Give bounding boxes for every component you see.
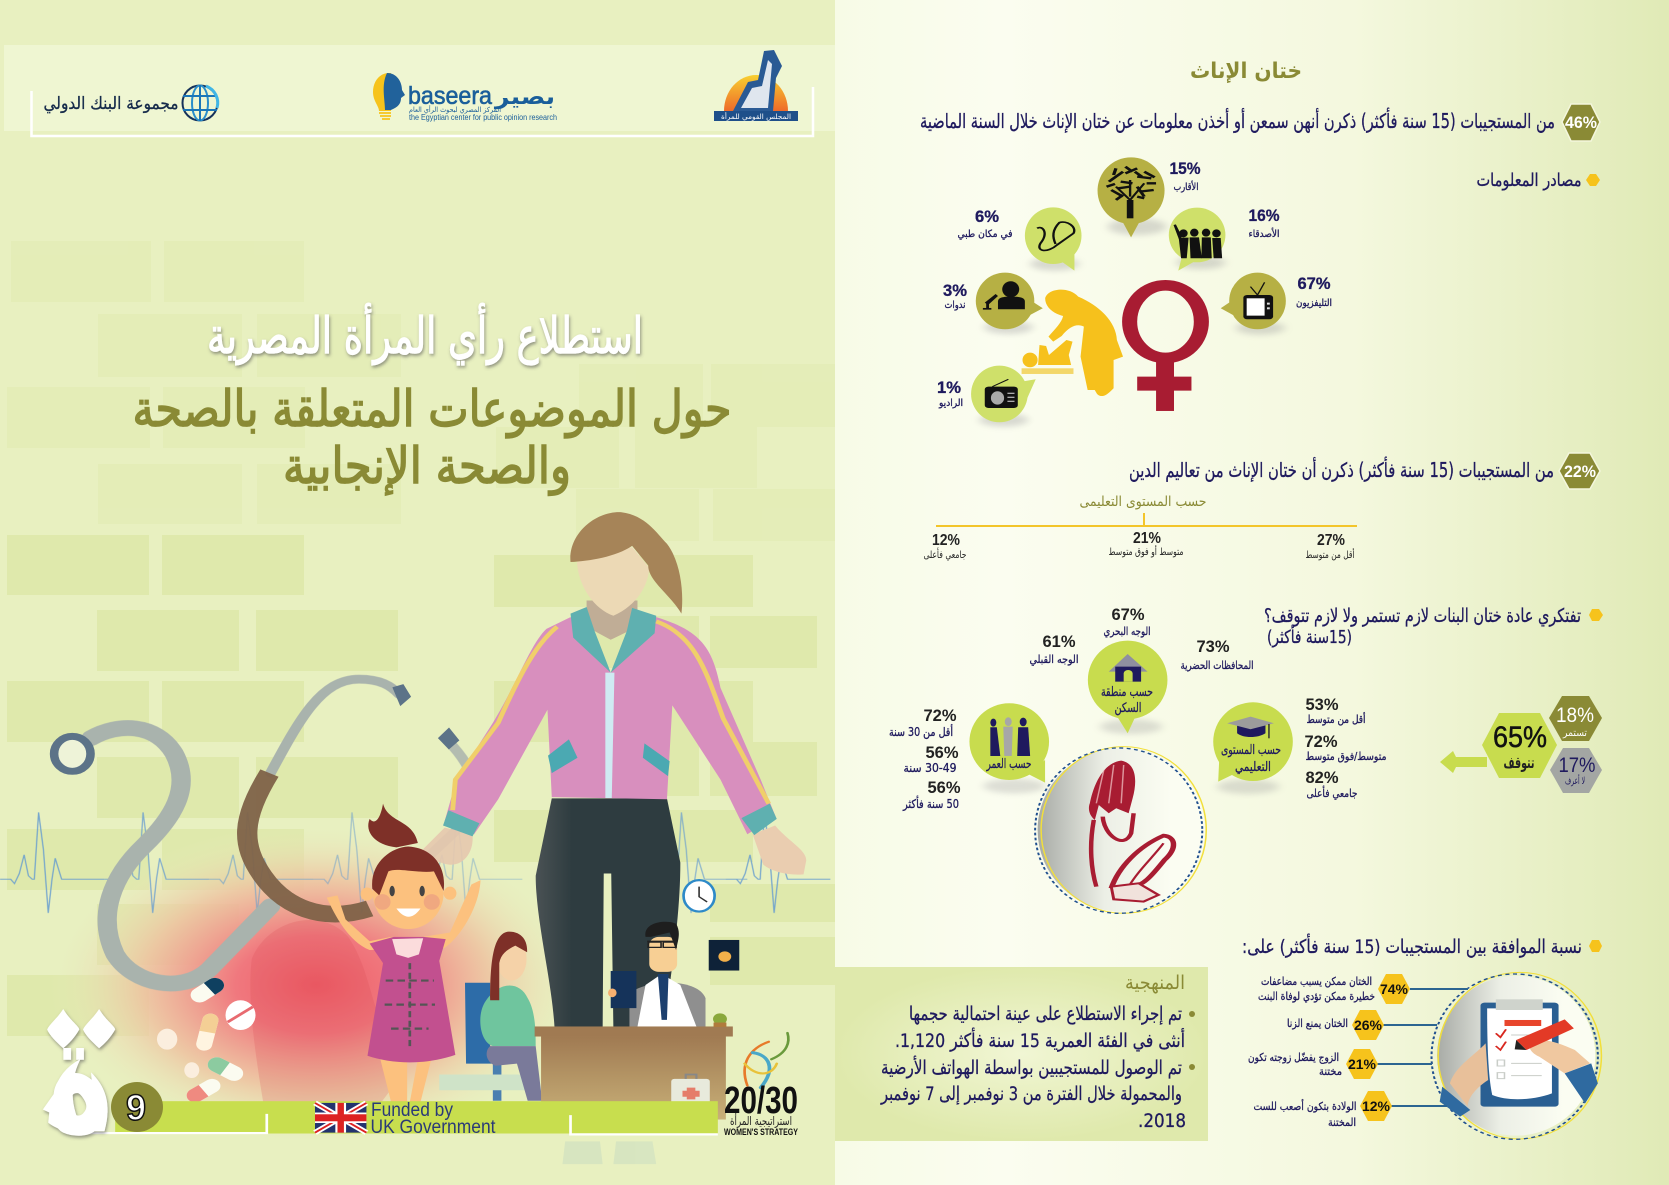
icon: family tree <box>1107 167 1156 218</box>
arrow <box>1440 751 1487 773</box>
age values: 50 سنة فأكثر <box>902 795 959 812</box>
logo: National Council for Women <box>714 50 798 121</box>
ultrasound picture <box>709 940 739 971</box>
friends label: الأصدقاء <box>1248 227 1280 240</box>
faint upper brick wall <box>7 241 835 541</box>
residence values: الوجه البحري <box>1104 625 1150 638</box>
age values: 56% <box>926 743 958 762</box>
item: husband prefers 21% <box>1248 1049 1378 1079</box>
agreement items <box>1248 974 1468 1129</box>
logo: World Bank Group: مجموعة البنك الدولي <box>44 94 178 114</box>
title line 3: والصحة الإنجابية <box>283 437 571 496</box>
logo: Baseera: baseera <box>408 82 492 110</box>
icon: group of friends <box>1174 224 1222 258</box>
icon: right sleeve <box>1565 1063 1598 1103</box>
hex: 65% stop <box>1482 713 1557 778</box>
below intermediate value: أقل من متوسط <box>1306 548 1355 561</box>
stethoscope <box>54 679 476 983</box>
university value: جامعي فأعلى <box>924 547 966 561</box>
bubble labels <box>986 685 1281 775</box>
bubble: medical place <box>1025 207 1082 271</box>
header bracket <box>32 87 813 136</box>
panel: methodology <box>835 967 1208 1141</box>
radio label: الراديو <box>938 398 963 409</box>
icon: red marker <box>1515 1019 1574 1050</box>
icon: stethoscope <box>1037 222 1074 250</box>
icon: speaker <box>983 281 1025 310</box>
icon: clipboard <box>1481 999 1559 1107</box>
bubble: television <box>1221 273 1286 335</box>
item: complications 74% <box>1258 974 1410 1004</box>
hex: 65% stop: 65% <box>1493 721 1547 754</box>
bubble: residence <box>1088 641 1167 734</box>
residence label <box>1101 685 1153 716</box>
education values: 82% <box>1306 768 1338 787</box>
doctor <box>608 922 706 1026</box>
bubble: relatives <box>1098 157 1166 237</box>
residence values: المحافظات الحضرية <box>1180 659 1254 672</box>
methodology text: 2018. <box>1138 1110 1186 1132</box>
hex: 18% continue <box>1549 696 1602 741</box>
medical label: 6% <box>975 207 999 226</box>
hex: 17% don't know: 17% <box>1558 754 1596 777</box>
residence label: حسب منطقة <box>1101 685 1153 700</box>
pills <box>157 975 256 1105</box>
question heading: (15سنة فأكثر) <box>1267 624 1352 648</box>
education label: التعليمي <box>1235 760 1271 775</box>
residence values <box>1030 605 1254 672</box>
item: husband prefers 21%: مختنة <box>1319 1065 1342 1078</box>
item: husband prefers 21%: الزوج يفضّل زوجته تكون <box>1248 1051 1339 1064</box>
source labels <box>937 159 1332 409</box>
green bottom bar <box>115 1101 718 1134</box>
bubble: age <box>969 703 1049 793</box>
title line 1: استطلاع رأي المرأة المصرية <box>207 303 643 365</box>
hex: 18% continue: 18% <box>1556 704 1594 727</box>
heading: agreement: نسبة الموافقة بين المستجيبات (15 سنة فأكثر) على: <box>1242 933 1582 958</box>
TV label <box>1296 274 1332 309</box>
bubble: education <box>1213 702 1293 794</box>
education label: حسب المستوى <box>1221 743 1281 758</box>
logo: Women's Strategy 2030 <box>724 1033 798 1137</box>
friends label: 16% <box>1248 206 1280 225</box>
page background left <box>0 0 835 1185</box>
logo: Women's Strategy 2030: استراتيجية المرأة <box>730 1113 792 1129</box>
stat row: 46%: من المستجيبات (15 سنة فأكثر) ذكرن أنهن سمعن أو أخذن معلومات عن ختان الإناث خلال السنة الماضية <box>920 107 1555 133</box>
icon: bulb with head <box>373 73 405 119</box>
icon: right hand <box>1529 1040 1590 1073</box>
information sources diagram <box>971 157 1286 427</box>
icon: radio <box>985 379 1018 408</box>
venus symbol <box>1130 285 1201 411</box>
calligraphy swirl <box>745 1033 788 1088</box>
icon: left sleeve <box>1440 1087 1470 1117</box>
question heading <box>1264 605 1603 648</box>
desk <box>535 1026 733 1120</box>
residence values: 61% <box>1042 632 1076 651</box>
bubble: friends <box>1169 208 1225 271</box>
radio label <box>937 378 963 409</box>
seminars label <box>943 281 967 311</box>
methodology heading: المنهجية <box>1125 972 1185 994</box>
connector lines <box>1377 989 1468 1106</box>
header band <box>4 45 835 131</box>
illustration: health scene <box>0 512 830 1164</box>
girl circle <box>1035 747 1206 913</box>
age values: 56% <box>928 778 960 797</box>
wall clock <box>684 880 715 912</box>
issue number badge <box>111 1082 163 1132</box>
medical label <box>958 207 1013 240</box>
age label: حسب العمر <box>986 757 1032 772</box>
age values <box>889 706 960 812</box>
methodology bullets <box>1189 1011 1195 1017</box>
residence values: 67% <box>1112 605 1144 624</box>
icon: left hand <box>1450 1043 1488 1107</box>
stat row: 22% <box>1129 453 1600 489</box>
education values <box>1304 695 1387 800</box>
hex: 17% don't know <box>1550 748 1602 793</box>
opinion diagram <box>969 641 1293 913</box>
hex: 17% don't know: لا أعرف <box>1565 774 1585 787</box>
UK flag <box>315 1103 366 1133</box>
TV label: التليفزيون <box>1296 298 1332 309</box>
bubble: radio <box>971 366 1036 427</box>
icon: graduation cap <box>1227 717 1274 738</box>
issue number badge: 9 <box>126 1087 146 1128</box>
funded by text: Funded by <box>371 1100 453 1121</box>
hex: 65% stop: تتوقف <box>1504 753 1534 772</box>
education values: متوسط/فوق متوسط <box>1306 750 1387 763</box>
logo: Baseera: المركز المصري لبحوث الرأي العام <box>409 105 501 114</box>
education values: 53% <box>1306 695 1338 714</box>
series logo <box>43 982 115 1170</box>
stat row: 22%: 22% <box>1564 462 1596 481</box>
radio label: 1% <box>937 378 961 397</box>
bottom white bracket <box>70 1114 718 1134</box>
item: prevents adultery 26% <box>1287 1010 1384 1040</box>
pale feet <box>562 1141 656 1164</box>
age values: أقل من 30 سنة <box>889 724 953 740</box>
heartbeat line <box>0 812 830 913</box>
below intermediate value: 27% <box>1317 532 1345 549</box>
item: husband prefers 21%: 21% <box>1348 1056 1377 1072</box>
methodology text <box>880 1003 1186 1132</box>
age values: 72% <box>924 706 956 725</box>
stat row: 22%: من المستجيبات (15 سنة فأكثر) ذكرن أن ختان الإناث من تعاليم الدين <box>1129 456 1554 482</box>
education breakdown chart <box>924 494 1357 561</box>
heading: FGM: ختان الإناث <box>1190 59 1302 84</box>
hex: 18% continue: تستمر <box>1562 728 1587 739</box>
icon: house <box>1109 654 1148 682</box>
relatives label: الأقارب <box>1174 180 1198 193</box>
intermediate value <box>1108 530 1184 558</box>
methodology text: أنثى في الفئة العمرية 15 سنة فأكثر 1,120. <box>895 1027 1185 1052</box>
girl in pink dress <box>327 804 481 1102</box>
university value: 12% <box>932 532 960 549</box>
funded by text: UK Government <box>370 1117 496 1138</box>
intermediate value: متوسط أو فوق متوسط <box>1108 545 1184 558</box>
university value <box>924 532 966 561</box>
stat row: 46% <box>920 104 1600 141</box>
below intermediate value <box>1306 532 1355 561</box>
friends label <box>1248 206 1280 240</box>
methodology text: والمحمولة خلال الفترة من 3 نوفمبر إلى 7 نوفمبر <box>880 1083 1182 1106</box>
logo: Women's Strategy 2030: 20/30 <box>724 1080 798 1122</box>
item: prevents adultery 26%: الختان يمنع الزنا <box>1287 1017 1348 1030</box>
pregnant woman on chair <box>439 932 542 1101</box>
education breakdown chart: حسب المستوى التعليمى <box>1080 494 1206 510</box>
TV label: 67% <box>1298 274 1330 293</box>
item: prevents adultery 26%: 26% <box>1354 1017 1383 1033</box>
plant <box>713 1013 727 1027</box>
relatives label <box>1170 159 1200 193</box>
logo: World Bank Group <box>44 85 218 121</box>
first-aid kit <box>671 1075 710 1105</box>
item: harder childbirth 12%: المختنة <box>1328 1116 1356 1129</box>
age values: 30-49 سنة <box>904 761 956 775</box>
residence label: السكن <box>1114 701 1142 716</box>
faded sitting figure <box>250 920 407 1129</box>
logo: Baseera: بصير <box>494 85 555 110</box>
residence values: 73% <box>1196 637 1230 656</box>
funded by text <box>370 1100 496 1138</box>
relatives label: 15% <box>1170 159 1200 178</box>
mother and baby <box>1022 290 1123 396</box>
item: complications 74%: 74% <box>1380 981 1409 997</box>
red glow <box>48 823 584 1147</box>
item: harder childbirth 12% <box>1254 1091 1392 1129</box>
icon: TV <box>1243 282 1273 319</box>
page background right <box>835 0 1669 1185</box>
stat row: 46%: 46% <box>1565 113 1597 132</box>
logo: Women's Strategy 2030: WOMEN'S STRATEGY <box>724 1127 798 1137</box>
clipboard circle <box>1432 972 1601 1139</box>
education label <box>1221 743 1281 775</box>
education values: 72% <box>1304 732 1338 751</box>
education values: جامعي فأعلى <box>1306 785 1358 800</box>
title line 2: حول الموضوعات المتعلقة بالصحة <box>132 380 732 438</box>
question heading: تفتكري عادة ختان البنات لازم تستمر ولا لازم تتوقف؟ <box>1264 605 1581 627</box>
item: complications 74%: خطيرة ممكن تؤدي لوفاة البنت <box>1258 990 1375 1003</box>
item: harder childbirth 12%: 12% <box>1362 1098 1391 1114</box>
icon: leaf marks and face profile <box>43 1009 115 1133</box>
seminars label: ندوات <box>944 300 966 311</box>
woman in pink jacket <box>421 512 806 1029</box>
methodology text: تم الوصول للمستجيبين بواسطة الهواتف الأرضية <box>881 1056 1182 1079</box>
item: complications 74%: الختان ممكن يسبب مضاعفات <box>1261 975 1372 988</box>
residence values: الوجه القبلي <box>1030 653 1078 666</box>
icon: sitting girl <box>1089 761 1174 902</box>
intermediate value: 21% <box>1133 530 1161 547</box>
logo: Baseera: the Egyptian center for public opinion research <box>409 113 557 122</box>
lower brick wall <box>7 535 835 1036</box>
icon: three generations <box>990 717 1030 756</box>
logo: National Council for Women: المجلس القومي للمرأة <box>721 112 791 121</box>
item: harder childbirth 12%: الولادة بتكون أصعب للست <box>1254 1099 1356 1113</box>
education values: أقل من متوسط <box>1306 712 1366 726</box>
bubble: seminars <box>976 273 1043 334</box>
logo: Baseera <box>373 73 557 122</box>
methodology text: تم إجراء الاستطلاع على عينة احتمالية حجمها <box>909 1003 1182 1026</box>
medical label: في مكان طبي <box>958 229 1013 240</box>
series logo letter: ة <box>48 982 110 1170</box>
seminars label: 3% <box>943 281 967 300</box>
heading: sources of information: مصادر المعلومات <box>1476 170 1582 191</box>
icon: globe <box>182 85 218 121</box>
